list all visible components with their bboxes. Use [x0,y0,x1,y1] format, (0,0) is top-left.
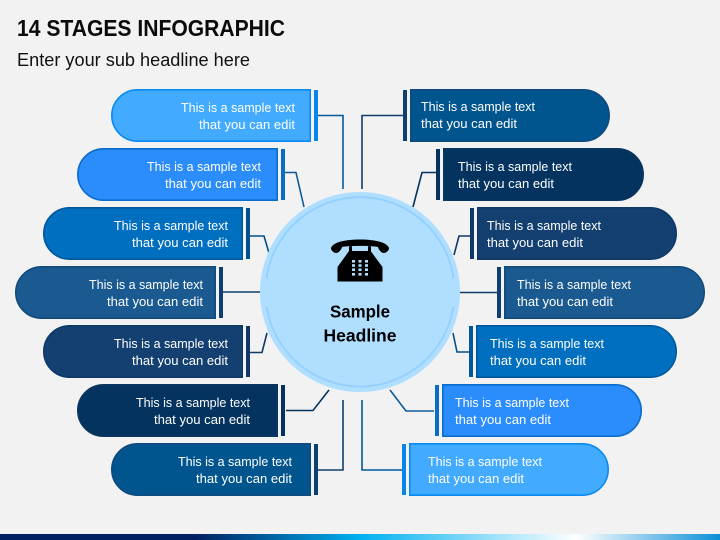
circle disc [260,192,460,392]
pill 6 left [78,385,277,436]
center headline: Headline [324,326,397,346]
stage 1 left [112,90,318,141]
text 7 right: This is a sample text [428,454,542,469]
stage 1 right [403,90,609,141]
connector: stage 4 right [459,292,497,294]
pill 2 left [78,149,277,200]
text 2 left: This is a sample text [147,159,261,174]
text 5 left: that you can edit [132,353,228,368]
stage 7 right [402,444,608,495]
text 6 left: that you can edit [154,412,250,427]
stage 3 left [44,208,250,259]
text 5 right: This is a sample text [490,336,604,351]
text 1 right: that you can edit [421,116,517,131]
bar 2 left [281,149,285,200]
text 7 left [178,454,292,486]
text 2 left [147,159,261,191]
stage 6 left [78,385,285,436]
pill 1 left [112,90,310,141]
pill 3 left [44,208,242,259]
text 1 right: This is a sample text [421,99,535,114]
bar 1 right [403,90,407,141]
text 3 right: that you can edit [487,235,583,250]
text 4 right [517,277,631,309]
text 5 left: This is a sample text [114,336,228,351]
subtitle: Enter your sub headline here [17,50,250,70]
text 6 right: that you can edit [455,412,551,427]
pill 3 right [478,208,676,259]
text 6 right [455,395,569,427]
connector: stage 6 left [286,390,329,410]
connector: stage 3 right [454,236,470,255]
pill 7 left [112,444,310,495]
central circle [260,192,460,392]
connector: stage 1 right [362,116,403,189]
stage 5 right [469,326,676,377]
text 6 left: This is a sample text [136,395,250,410]
connector: stage 7 left [318,400,343,470]
pill 5 left [44,326,242,377]
text 4 right: This is a sample text [517,277,631,292]
text 3 left: that you can edit [132,235,228,250]
connector: stage 1 left [318,116,343,189]
connector: stage 4 left [223,291,261,293]
text 7 right: that you can edit [428,471,524,486]
connector: stage 2 left [285,172,304,207]
connector: stage 6 right [390,390,434,411]
text 5 left [114,336,228,368]
bar 7 left [314,444,318,495]
bar 3 left [246,208,250,259]
pill 4 right [505,267,704,318]
text 4 left: This is a sample text [89,277,203,292]
connector: stage 3 left [250,236,269,253]
icon: telephone [331,240,389,282]
pill 4 left [16,267,215,318]
stage 3 right [470,208,676,259]
connector: stage 2 right [413,172,436,207]
bar 3 right [470,208,474,259]
stage 7 left [112,444,318,495]
text 4 right: that you can edit [517,294,613,309]
text 1 left [181,100,295,132]
pill 7 right [410,444,608,495]
connector: stage 5 right [453,333,469,352]
bar 4 right [497,267,501,318]
bar 5 right [469,326,473,377]
stage 6 right [435,385,641,436]
stage 5 left [44,326,250,377]
bar 6 right [435,385,439,436]
text 5 right: that you can edit [490,353,586,368]
connector: stage 7 right [362,400,404,470]
pill 6 right [443,385,641,436]
text 2 right: that you can edit [458,176,554,191]
stage 2 right [436,149,643,200]
bar 7 right [402,444,406,495]
text 7 left: that you can edit [196,471,292,486]
stage 2 left [78,149,285,200]
text 6 right: This is a sample text [455,395,569,410]
text 2 right: This is a sample text [458,159,572,174]
center headline [324,302,397,346]
connector: stage 5 left [250,333,267,352]
text 3 left: This is a sample text [114,218,228,233]
center headline: Sample [330,302,390,322]
text 3 left [114,218,228,250]
bar 4 left [219,267,223,318]
pill 2 right [444,149,643,200]
stage 4 left [16,267,223,318]
text 2 right [458,159,572,191]
bottom gradient bar [0,534,720,540]
text 1 left: that you can edit [199,117,295,132]
bar 2 right [436,149,440,200]
text 4 left: that you can edit [107,294,203,309]
bar 6 left [281,385,285,436]
title: 14 STAGES INFOGRAPHIC [17,15,285,41]
text 6 left [136,395,250,427]
pill 5 right [477,326,676,377]
stage 4 right [497,267,704,318]
inner arc top [266,197,454,278]
text 3 right: This is a sample text [487,218,601,233]
text 7 left: This is a sample text [178,454,292,469]
text 2 left: that you can edit [165,176,261,191]
bar 1 left [314,90,318,141]
text 1 right [421,99,535,131]
text 3 right [487,218,601,250]
bar 5 left [246,326,250,377]
text 5 right [490,336,604,368]
inner arc bottom [267,307,453,386]
text 4 left [89,277,203,309]
text 1 left: This is a sample text [181,100,295,115]
pill 1 right [411,90,609,141]
text 7 right [428,454,542,486]
